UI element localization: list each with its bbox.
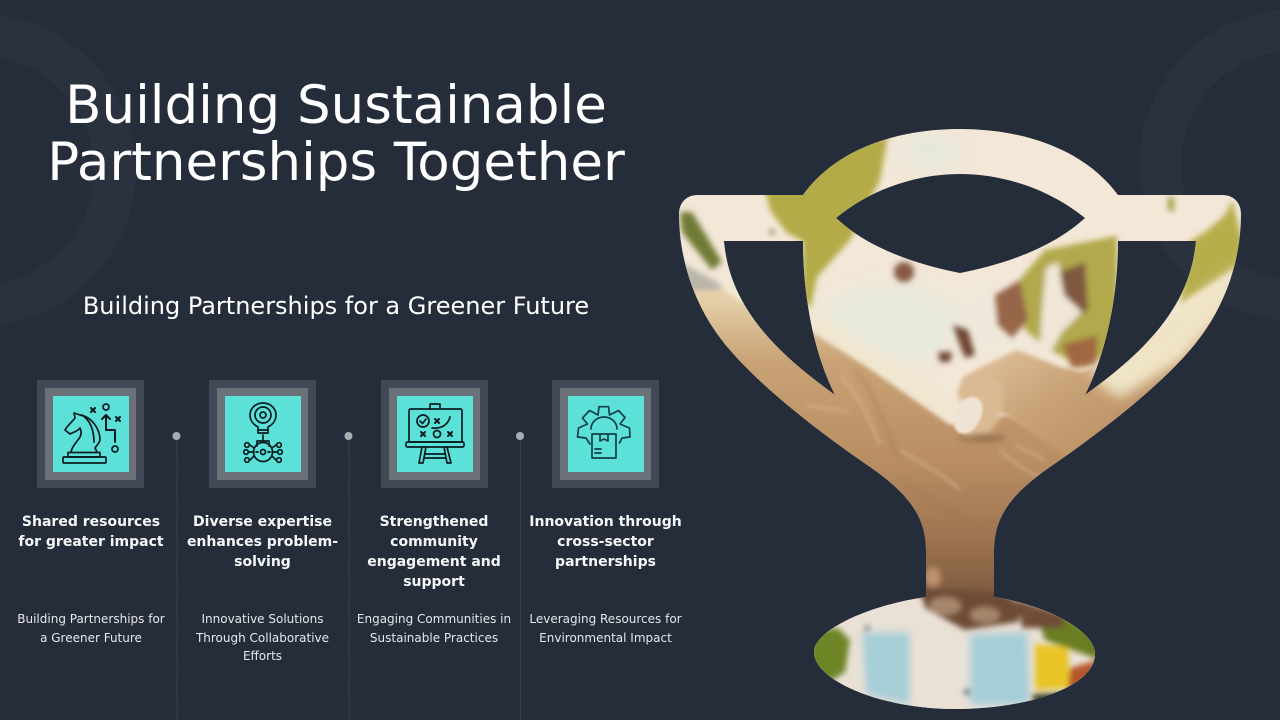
description 4: Leveraging Resources for [529,612,682,626]
heading 3: community [390,534,478,550]
heading 4 [529,514,682,570]
heading 4: Innovation through [529,514,682,530]
title: Partnerships Together [47,132,625,193]
subtitle: Building Partnerships for a Greener Future [83,292,589,320]
title [47,75,625,193]
description 3: Sustainable Practices [370,630,498,644]
description 4: Environmental Impact [539,630,672,644]
trophy photo [670,120,1250,720]
heading 2: Diverse expertise [193,514,332,530]
heading 3: Strengthened [380,514,488,530]
heading 3: support [403,574,465,590]
clasped hands [734,282,908,382]
description 3 [357,612,511,644]
title: Building Sustainable [65,75,607,136]
description 1: a Greener Future [40,630,142,644]
map landmass [680,135,1245,368]
heading 4: partnerships [555,554,656,570]
heading 4: cross-sector [557,534,654,550]
description 2: Innovative Solutions [201,612,324,626]
lower map [814,597,1095,709]
icon: strategy whiteboard [381,380,488,488]
heading 3 [367,514,501,590]
thumb nail [954,397,982,434]
heading 1 [18,514,164,550]
description 2: Efforts [243,649,282,663]
heading 2 [187,514,338,570]
description 4 [529,612,682,644]
icon: lightbulb gear network [209,380,316,488]
heading 1: Shared resources [22,514,160,530]
decorative background and trophy [679,129,1241,709]
description 2: Through Collaborative [196,630,329,644]
description 1 [17,612,165,644]
heading 2: solving [234,554,291,570]
heading 3: engagement and [367,554,501,570]
icon: gear and package [552,380,659,488]
icon: chess knight strategy [37,380,144,488]
heading 2: enhances problem- [187,534,338,550]
description 1: Building Partnerships for [17,612,165,626]
description 3: Engaging Communities in [357,612,511,626]
description 2 [196,612,329,663]
heading 1: for greater impact [18,534,164,550]
